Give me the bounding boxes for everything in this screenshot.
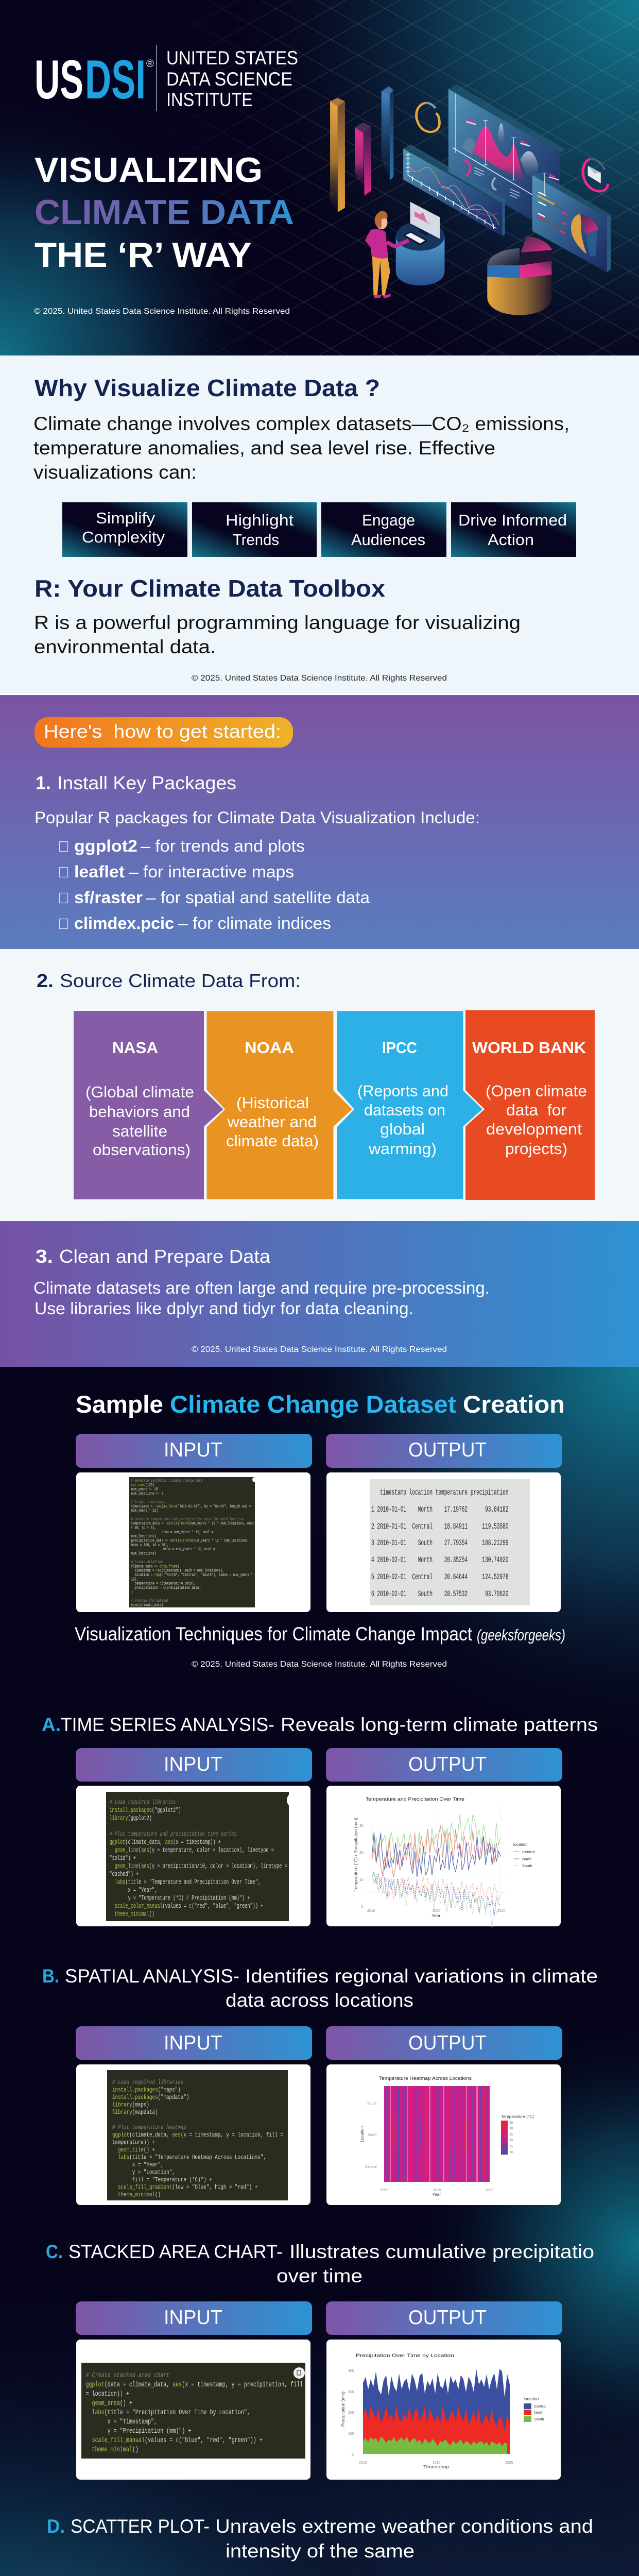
icon: pink pillar — [355, 122, 371, 196]
panel: time series code: ggplot(climate_data, aes(x = timestamp)) + — [109, 1839, 221, 1846]
panel: stacked area code: theme_minimal() — [85, 2446, 139, 2454]
title: CLIMATE DATA — [34, 193, 294, 232]
panel: install key packages — [0, 695, 639, 949]
chart: temperature heatmap — [384, 2086, 490, 2182]
panel: time series code: # Load required libraries — [109, 1799, 176, 1806]
panel: heatmap chart: Location — [359, 2126, 365, 2142]
panel: time series chart: 10 — [359, 1878, 364, 1882]
logo: USDSI wordmark: UNITED STATES — [166, 47, 298, 69]
text block: temperature anomalies, and sea level rise. Effective — [33, 437, 495, 459]
panel: heatmap code: y = "Location", — [112, 2170, 175, 2176]
input header — [76, 1434, 312, 1468]
panel: dataset output table: 3 2010-01-01 South 27.79354 108.21299 — [371, 1538, 508, 1548]
panel: time series chart: South — [522, 1863, 532, 1868]
panel: dataset code: num_years * 12) — [131, 1509, 158, 1514]
box: drive informed action — [451, 502, 576, 557]
panel: stacked area code: geom_area() + — [85, 2399, 132, 2408]
panel: clean and prepare data — [0, 1221, 639, 1367]
chevron: ipcc: datasets on — [364, 1101, 445, 1119]
chevron: noaa: NOAA — [245, 1039, 294, 1057]
logo: USDSI wordmark: US — [34, 48, 83, 110]
heading: scatter plot: D. — [47, 2516, 65, 2537]
panel: heatmap code: temperature)) + — [112, 2139, 155, 2146]
text block: environmental data. — [34, 636, 216, 657]
panel: heatmap chart: 2015 — [433, 2189, 441, 2192]
panel: stacked area chart: 300 — [348, 2391, 354, 2394]
text block: visualizations can: — [33, 462, 197, 483]
heading: step 1: 1. — [36, 772, 51, 793]
panel: heatmap chart: 30 — [509, 2127, 513, 2130]
heading: step 3: 3. — [36, 1246, 53, 1267]
logo: USDSI wordmark — [34, 45, 298, 111]
panel: time series chart: North — [522, 1857, 531, 1861]
heading: scatter plot: intensity of the same — [226, 2540, 415, 2562]
heading: stacked area chart: Illustrates cumulative precipitatio — [289, 2241, 594, 2262]
panel: time series chart: 30 — [359, 1824, 364, 1828]
panel: stacked area code: labs(title = "Precipitation Over Time by Location", — [85, 2409, 250, 2417]
panel: heatmap code: theme_minimal() — [112, 2192, 161, 2199]
panel: time series chart: location — [513, 1842, 528, 1847]
panel: stacked area chart: 100 — [348, 2432, 354, 2436]
panel: stacked area chart: South — [534, 2417, 544, 2421]
panel: heatmap chart: Temperature (°C) — [501, 2114, 534, 2119]
panel: dataset code: mean = 100, sd = 30), — [131, 1543, 169, 1548]
panel: dataset code: 12), — [131, 1578, 138, 1582]
output header — [326, 1434, 562, 1468]
icon: orange pillar — [330, 98, 345, 212]
panel: heatmap code: ggplot(climate_data, aes(x = timestamp, y = location, fill = — [112, 2132, 283, 2139]
panel: heatmap code: labs(title = "Temperature Heatmap Across Locations", — [112, 2155, 266, 2161]
panel: dataset output table: 6 2010-02-01 South 28.57532 93.70620 — [371, 1589, 508, 1599]
chart: precipitation stacked areas — [363, 2369, 510, 2454]
title: VISUALIZING — [34, 150, 263, 190]
panel: time series chart: Temperature (°C) / Precipitation (mm) — [353, 1818, 358, 1891]
panel: time series chart: Year — [431, 1913, 440, 1918]
input header — [76, 2026, 312, 2060]
copyright: © 2025. United States Data Science Institute. All Rights Reserved — [192, 674, 447, 683]
panel: heatmap chart: 2020 — [486, 2189, 494, 2192]
panel: heatmap code: x = "Year", — [112, 2162, 164, 2168]
panel: stacked area chart: location — [524, 2396, 539, 2401]
panel: heatmap chart: 35 — [509, 2121, 513, 2125]
panel: heatmap chart: 15 — [509, 2145, 513, 2148]
chevron: world bank: WORLD BANK — [472, 1039, 586, 1057]
panel: heatmap code: install.packages("mapdata") — [112, 2094, 189, 2102]
output header — [326, 2026, 562, 2060]
box: simplify complexity: Complexity — [82, 528, 165, 546]
panel: stacked area chart: 400 — [348, 2369, 354, 2373]
panel: dataset code: ) — [131, 1590, 133, 1595]
panel: header hero — [0, 0, 639, 355]
text block: Climate change involves complex datasets—CO₂ emissions, — [33, 413, 569, 434]
icon: console cylinder with monitor — [396, 202, 444, 285]
output header — [326, 2301, 562, 2335]
text block — [34, 612, 521, 657]
chevron: ipcc: IPCC — [382, 1039, 417, 1057]
panel: stacked area chart: 0 — [352, 2453, 354, 2457]
panel: dataset code: num_locations) — [131, 1552, 156, 1556]
chevron: ipcc: warming) — [368, 1140, 437, 1158]
input header: INPUT — [164, 1439, 222, 1461]
logo: USDSI wordmark: ® — [146, 58, 154, 70]
chevron: world bank: data for — [506, 1101, 566, 1119]
heading: step 1: Install Key Packages — [57, 772, 236, 793]
icon: pie cylinder — [487, 236, 552, 315]
illustration: isometric data dashboard — [330, 84, 611, 315]
heading: Why Visualize Climate Data ? — [34, 375, 380, 401]
heading: stacked area chart: STACKED AREA CHART- — [68, 2241, 283, 2262]
panel: stacked area chart: Precipitation (mm) — [340, 2392, 346, 2427]
heading: step 2: 2. — [37, 970, 54, 991]
copyright: © 2025. United States Data Science Institute. All Rights Reserved — [192, 1660, 447, 1669]
chevron: nasa: NASA — [112, 1039, 158, 1057]
panel: time series code: geom_line(aes(y = temperature, color = location), linetype = — [109, 1847, 274, 1854]
box: drive informed action: Drive Informed — [458, 511, 567, 529]
panel: time series code: "dashed") + — [109, 1871, 139, 1878]
panel: dataset code: climate_data <- data.frame( — [131, 1565, 179, 1569]
package list: climdex.pcic — [74, 914, 174, 933]
panel: time series code: labs(title = "Temperature and Precipitation Over Time", — [109, 1879, 261, 1886]
panel: time series chart: 2010 — [367, 1909, 375, 1913]
panel: dataset code: num_years <- 10 — [131, 1487, 158, 1492]
chevron: noaa: (Historical — [236, 1094, 309, 1112]
output header — [326, 1748, 562, 1782]
panel: dataset code: set.seed(123) — [131, 1483, 154, 1488]
heading: spatial analysis — [42, 1965, 598, 2011]
heading: spatial analysis: B. — [42, 1965, 59, 1987]
panel: time series chart: Central — [522, 1850, 535, 1854]
panel: dataset output table: timestamp location temperature precipitation — [371, 1488, 508, 1497]
panel: time series chart: 20 — [359, 1851, 364, 1855]
subheading: visualization techniques: Visualization Techniques for Climate Change Impact — [75, 1623, 473, 1645]
box: engage audiences: Audiences — [351, 531, 425, 549]
panel: dataset output table: 5 2010-02-01 Central 20.64644 124.52978 — [371, 1572, 508, 1582]
box: highlight trends: Trends — [233, 531, 279, 549]
heading: sample dataset creation: Sample — [76, 1391, 163, 1418]
panel: heatmap chart: North — [368, 2133, 376, 2137]
input header: INPUT — [164, 2032, 222, 2054]
chevron: nasa: (Global climate — [85, 1083, 194, 1101]
box: highlight trends — [192, 502, 317, 557]
panel: heatmap chart: 10 — [509, 2150, 513, 2154]
package list — [60, 837, 370, 933]
icon: orange ring — [417, 103, 439, 132]
text block: Popular R packages for Climate Data Visualization Include: — [34, 808, 480, 827]
panel: heatmap code: install.packages("maps") — [112, 2087, 181, 2094]
panel: time series code: y = "Temperature (°C) / Precipitation (mm)") + — [109, 1895, 250, 1902]
heading: stacked area chart: over time — [277, 2265, 362, 2286]
text block: Use libraries like dplyr and tidyr for data cleaning. — [34, 1299, 413, 1318]
logo: USDSI wordmark: DATA SCIENCE — [166, 69, 292, 90]
panel: heatmap chart: 2010 — [381, 2189, 389, 2192]
panel: stacked area chart: Timestamp — [423, 2464, 449, 2469]
panel: dataset code: precipitation = c(precipitation_data) — [131, 1586, 201, 1590]
panel: heatmap code: # Plot temperature heatmap — [112, 2124, 186, 2131]
panel: time series chart — [326, 1786, 561, 1928]
panel: stacked area chart: Precipitation Over Time by Location — [356, 2353, 454, 2359]
panel: dataset code: location = rep(c("North", "Central", "South"), times = num_years * — [131, 1573, 253, 1578]
text block: Climate datasets are often large and require pre-processing. — [33, 1278, 490, 1297]
panel: time series code: # Plot temperature and precipitation time series — [109, 1831, 237, 1838]
output header: OUTPUT — [408, 1753, 487, 1775]
text block — [33, 1278, 490, 1318]
panel: dataset code: timestamp = rep(timestamps, each = num_locations), — [131, 1569, 224, 1573]
panel: dataset output table: 2 2010-01-01 Central 18.84911 119.53580 — [371, 1522, 508, 1531]
heading: spatial analysis: Identifies regional variations in climate — [245, 1965, 598, 1987]
chevron: noaa — [206, 1010, 353, 1200]
panel: time series code — [76, 1786, 310, 1926]
chevron: world bank: development — [486, 1120, 582, 1138]
package list: – for interactive maps — [129, 862, 294, 881]
chevron: nasa: observations) — [93, 1141, 191, 1159]
panel: stacked area chart: North — [534, 2410, 543, 2415]
chevron: world bank: (Open climate — [486, 1082, 587, 1100]
package list: – for spatial and satellite data — [146, 888, 370, 907]
panel: time series chart: Temperature and Precipitation Over Time — [366, 1797, 464, 1802]
panel: time series code: library(ggplot2) — [109, 1815, 152, 1822]
subheading: visualization techniques: (geeksforgeeks) — [477, 1626, 565, 1644]
panel: time series code: x = "Year", — [109, 1887, 157, 1894]
heading: sample dataset creation: Creation — [463, 1391, 565, 1418]
panel: time series code: install.packages("ggplot2") — [109, 1807, 181, 1815]
chevron: nasa: behaviors and — [89, 1103, 190, 1121]
panel: time series chart: 0 — [361, 1905, 363, 1909]
panel: stacked area chart — [326, 2340, 561, 2480]
output header: OUTPUT — [408, 2032, 487, 2054]
panel: dataset code: num_locations <- 3 — [131, 1492, 163, 1496]
title: THE ‘R’ WAY — [34, 235, 252, 275]
logo: USDSI wordmark: INSTITUTE — [166, 89, 253, 110]
heading: stacked area chart: C. — [46, 2241, 63, 2262]
package list: leaflet — [74, 862, 125, 881]
panel: stacked area code: x = "Timestamp", — [85, 2418, 157, 2426]
chart: temperature and precipitation lines — [364, 1805, 506, 1928]
panel: heatmap code — [76, 2064, 310, 2205]
panel: time series code: geom_line(aes(y = precipitation/10, color = location), linetype = — [109, 1863, 287, 1870]
panel: main area chart screen — [448, 84, 565, 220]
chevron: nasa — [73, 1010, 224, 1200]
panel: heatmap code: # Load required libraries — [112, 2079, 183, 2086]
panel: dataset output table — [326, 1472, 561, 1612]
panel: heatmap code: library(mapdata) — [112, 2109, 158, 2116]
copyright: © 2025. United States Data Science Institute. All Rights Reserved — [34, 307, 290, 316]
chevron: noaa: weather and — [227, 1113, 317, 1131]
callout: get started pill: Here's how to get started: — [44, 721, 281, 742]
input header: INPUT — [164, 2307, 222, 2329]
panel: dataset code — [76, 1472, 310, 1612]
panel: dataset code: nrow = num_years * 12, ncol = — [131, 1530, 213, 1535]
panel: dataset output table: 4 2010-02-01 North 20.35254 130.74020 — [371, 1555, 508, 1565]
panel: heatmap chart: Temperature Heatmap Across Locations — [379, 2076, 472, 2081]
panel: stacked area code: = location)) + — [85, 2390, 129, 2398]
panel: stacked area chart: 2015 — [433, 2461, 441, 2465]
panel: dataset code: num_locations) — [131, 1534, 156, 1539]
panel: source climate data — [0, 949, 639, 1221]
panel: heatmap chart: 20 — [509, 2139, 513, 2142]
panel: dataset code: temperature_data <- matrix(rnorm(num_years * 12 * num_locations, mean — [131, 1521, 254, 1527]
chevron: noaa: climate data) — [226, 1132, 319, 1150]
box: engage audiences: Engage — [362, 511, 415, 529]
heading: spatial analysis: SPATIAL ANALYSIS- — [65, 1965, 239, 1987]
panel: dataset code: # Preview the dataset — [131, 1599, 169, 1603]
box: highlight trends: Highlight — [226, 511, 293, 529]
heading: step 2: Source Climate Data From: — [60, 970, 301, 991]
panel: dataset code: precipitation_data <- matrix(rnorm(num_years * 12 * num_locations, — [131, 1539, 249, 1544]
panel: stacked area chart: 2010 — [359, 2461, 367, 2465]
heading: scatter plot — [47, 2516, 593, 2562]
panel: stacked area code: # Create stacked area chart — [85, 2371, 169, 2380]
panel: heatmap code: geom_tile() + — [112, 2147, 155, 2154]
heading: sample dataset creation: Climate Change Dataset — [170, 1391, 456, 1418]
box: simplify complexity — [62, 502, 187, 557]
icon: person at console — [365, 211, 409, 298]
input header: INPUT — [164, 1753, 222, 1775]
panel: stacked area chart: 200 — [348, 2411, 354, 2415]
chevron: nasa: satellite — [112, 1122, 167, 1140]
panel: time series code: "solid") + — [109, 1855, 136, 1862]
panel: heatmap chart: Year — [432, 2192, 441, 2197]
text block: R is a powerful programming language for visualizing — [34, 612, 521, 633]
panel: stacked area chart: 2020 — [505, 2461, 513, 2465]
panel: dataset code: = 20, sd = 5), — [131, 1526, 156, 1531]
callout: get started pill — [34, 717, 293, 748]
heading: time series analysis: Reveals long-term climate patterns — [281, 1714, 598, 1735]
panel: stacked area code: ggplot(data = climate_data, aes(x = timestamp, y = precipitation, fill — [85, 2381, 303, 2389]
panel: stacked area chart: Central — [534, 2404, 547, 2409]
panel: stacked area code: y = "Precipitation (mm)") + — [85, 2427, 191, 2435]
heading: step 3: Clean and Prepare Data — [59, 1246, 271, 1267]
box: drive informed action: Action — [488, 531, 534, 549]
copyright: © 2025. United States Data Science Institute. All Rights Reserved — [192, 1345, 447, 1354]
chevron: world bank — [465, 1010, 595, 1200]
panel: stacked area code: scale_fill_manual(values = c("blue", "red", "green")) + — [85, 2436, 263, 2445]
panel: stacked area code — [76, 2340, 310, 2480]
icon: blue pillar — [382, 86, 393, 180]
panel: time series code: theme_minimal() — [109, 1911, 154, 1918]
box: simplify complexity: Simplify — [96, 509, 156, 527]
panel: heatmap chart: Central — [365, 2165, 377, 2169]
heading: stacked area chart — [46, 2241, 594, 2286]
input header — [76, 2301, 312, 2335]
chevron: ipcc — [336, 1010, 483, 1200]
panel: dataset code: # Generate temperature and precipitation data for each location — [131, 1517, 244, 1522]
panel: heatmap chart — [326, 2064, 561, 2205]
panel: dataset code: nrow = num_years * 12, ncol = — [131, 1547, 215, 1552]
package list: – for trends and plots — [141, 837, 305, 855]
panel: heatmap chart: South — [367, 2102, 376, 2106]
panel: dataset code: # Create dataframe — [131, 1560, 163, 1565]
panel: dark sample section background — [0, 1367, 639, 2576]
panel: heatmap code: fill = "Temperature (°C)") + — [112, 2177, 212, 2184]
chevron: world bank: projects) — [505, 1140, 567, 1158]
panel: pie and bars screen — [532, 173, 611, 272]
panel: line chart screen — [403, 144, 507, 236]
heading: spatial analysis: data across locations — [226, 1990, 413, 2011]
package list: ggplot2 — [74, 837, 137, 855]
panel: heatmap chart: 25 — [509, 2133, 513, 2137]
heading: R: Your Climate Data Toolbox — [34, 575, 385, 602]
panel: dataset code: # Generate synthetic climate change data — [131, 1479, 202, 1483]
chevron: ipcc: global — [380, 1120, 425, 1138]
text block — [33, 413, 569, 483]
output header: OUTPUT — [408, 1439, 487, 1461]
output header: OUTPUT — [408, 2307, 487, 2329]
heading: scatter plot: SCATTER PLOT- — [71, 2516, 210, 2537]
panel: dataset code: timestamps <- seq(as.Date("2010-01-01"), by = "month", length.out = — [131, 1504, 251, 1509]
heading: sample dataset creation — [76, 1391, 565, 1418]
package list: – for climate indices — [178, 914, 331, 933]
heading: time series analysis: A. — [42, 1714, 61, 1735]
input header — [76, 1748, 312, 1782]
panel: dataset code: head(climate_data) — [131, 1603, 163, 1608]
chevron: ipcc: (Reports and — [357, 1082, 448, 1100]
panel: heatmap code: scale_fill_gradient(low = "blue", high = "red") + — [112, 2184, 257, 2191]
heading: time series analysis — [42, 1714, 598, 1735]
panel: why visualize climate data — [0, 355, 639, 695]
panel: time series chart: 2015 — [433, 1909, 441, 1913]
panel: dataset code: temperature = c(temperature_data), — [131, 1582, 196, 1586]
panel: time series chart: 2020 — [497, 1909, 506, 1913]
panel: dataset output table: 1 2010-01-01 North 17.19762 93.84182 — [371, 1505, 508, 1514]
panel: time series code: scale_color_manual(values = c("red", "blue", "green")) + — [109, 1903, 263, 1910]
icon: envelope in ring — [583, 159, 608, 191]
title — [34, 150, 294, 275]
heading: time series analysis: TIME SERIES ANALYSIS- — [61, 1714, 274, 1735]
panel: dataset code: # Create timestamps — [131, 1500, 165, 1505]
heading: scatter plot: Unravels extreme weather conditions and — [215, 2516, 593, 2537]
box: engage audiences — [321, 502, 446, 557]
package list: sf/raster — [74, 888, 143, 907]
logo: USDSI wordmark: DSI — [85, 48, 146, 110]
panel: heatmap code: library(maps) — [112, 2102, 149, 2109]
